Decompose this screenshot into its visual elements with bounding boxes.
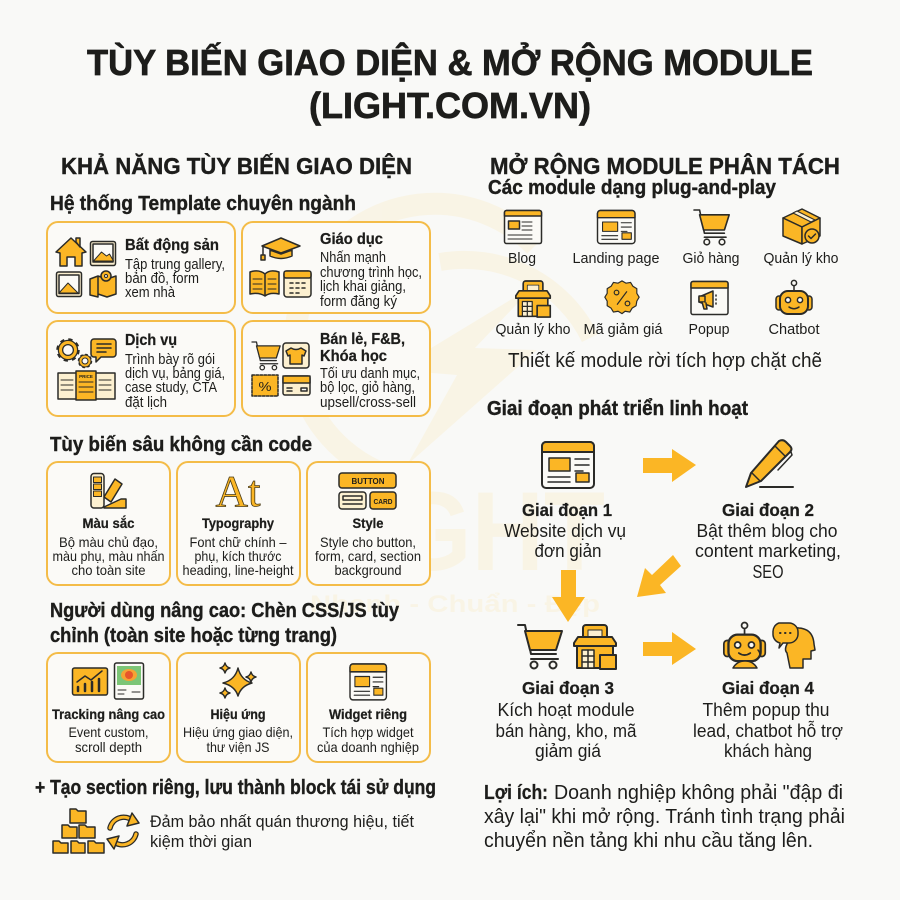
panel: giáo dục bbox=[242, 222, 430, 313]
phase 1: đơn giản bbox=[534, 540, 602, 561]
heading: no code: Tùy biến sâu không cần code bbox=[50, 433, 312, 456]
panel: style: Style bbox=[352, 515, 384, 531]
phase 1: Website dịch vụ bbox=[504, 520, 626, 541]
arrow: phase 1 to 3 bbox=[552, 570, 585, 622]
panel: giáo dục: form đăng ký bbox=[320, 294, 398, 310]
module: discount bbox=[584, 281, 663, 338]
panel: giáo dục: lịch khai giảng, bbox=[320, 279, 406, 295]
icon: services bbox=[58, 339, 116, 400]
icon: pencil bbox=[746, 440, 793, 487]
panel: giáo dục: chương trình học, bbox=[320, 265, 422, 281]
panel: bán lẻ: Tối ưu danh mục, bbox=[320, 366, 420, 382]
icon: retail bbox=[252, 342, 310, 396]
module: inventory box: Quản lý kho bbox=[764, 250, 838, 267]
phase 2: SEO bbox=[752, 561, 784, 582]
panel: widget: của doanh nghiệp bbox=[317, 739, 419, 755]
heading: phases: Giai đoạn phát triển linh hoạt bbox=[487, 398, 748, 420]
module: chatbot bbox=[768, 280, 820, 338]
phase 4 bbox=[693, 622, 843, 761]
icon: robot and human bbox=[724, 622, 815, 668]
module: inventory box bbox=[764, 209, 838, 267]
phase 4: Thêm popup thu bbox=[702, 699, 830, 720]
watermark logo bbox=[295, 204, 605, 618]
module: shopping cart bbox=[682, 210, 740, 267]
title bbox=[87, 41, 813, 126]
panel: typography: heading, line-height bbox=[182, 562, 294, 578]
text: brand consistency: Đảm bảo nhất quán thương hiệu, tiết bbox=[150, 812, 414, 831]
title: TÙY BIẾN GIAO DIỆN & MỞ RỘNG MODULE bbox=[87, 41, 813, 83]
heading: advanced users bbox=[50, 599, 400, 647]
phase 4: khách hàng bbox=[724, 740, 812, 761]
phase 4: Giai đoạn 4 bbox=[722, 678, 814, 698]
phase 3: Giai đoạn 3 bbox=[522, 678, 614, 698]
heading: templates: Hệ thống Template chuyên ngành bbox=[50, 192, 356, 215]
panel: style: form, card, section bbox=[315, 548, 421, 564]
icon: button and card bbox=[339, 473, 396, 509]
panel: màu sắc: cho toàn site bbox=[72, 562, 146, 578]
icon: color swatches bbox=[91, 474, 126, 508]
panel: màu sắc: Màu sắc bbox=[82, 514, 135, 531]
module: shopping cart: Giỏ hàng bbox=[682, 250, 740, 267]
panel: typography: phụ, kích thước bbox=[194, 548, 282, 564]
icon: At letters: At bbox=[216, 467, 260, 516]
heading: plug and play: Các module dạng plug-and-play bbox=[488, 177, 777, 199]
panel: typography bbox=[177, 462, 300, 585]
panel: bán lẻ: bộ lọc, giỏ hàng, bbox=[320, 380, 415, 396]
text: brand consistency: kiệm thời gian bbox=[150, 832, 252, 851]
panel: dịch vụ: PRICE bbox=[79, 374, 93, 379]
panel: dịch vụ: Trình bày rõ gói bbox=[125, 352, 215, 368]
panel: widget: Widget riêng bbox=[329, 706, 407, 722]
text: benefit: xây lại" khi mở rộng. Tránh tình trạng phải bbox=[484, 805, 845, 828]
watermark logo: LIGHT bbox=[305, 469, 605, 594]
panel: hiệu ứng bbox=[177, 653, 300, 762]
module: blog bbox=[504, 210, 542, 267]
text: loose modules: Thiết kế module rời tích hợp chặt chẽ bbox=[508, 350, 822, 372]
panel: tracking bbox=[47, 653, 170, 762]
icon: widget window bbox=[350, 664, 386, 700]
panel: bất động sản: Bất động sản bbox=[125, 237, 219, 254]
module: popup bbox=[688, 282, 730, 338]
heading: advanced users: chỉnh (toàn site hoặc từng trang) bbox=[50, 624, 337, 647]
panel: màu sắc: màu phụ, màu nhấn bbox=[52, 548, 164, 564]
icon: folders and sync bbox=[53, 809, 139, 853]
arrow: phase 2 to 3 bbox=[637, 555, 681, 597]
panel: bán lẻ bbox=[242, 321, 430, 416]
module: landing page: Landing page bbox=[572, 250, 660, 267]
panel: bất động sản: xem nhà bbox=[125, 285, 176, 301]
module: discount: Mã giảm giá bbox=[584, 321, 663, 338]
icon: button and card: CARD bbox=[374, 497, 393, 506]
phase 1: Giai đoạn 1 bbox=[522, 500, 612, 520]
panel: giáo dục: Nhấn mạnh bbox=[320, 250, 386, 266]
panel: dịch vụ bbox=[47, 321, 235, 416]
heading: left column: KHẢ NĂNG TÙY BIẾN GIAO DIỆN bbox=[61, 151, 412, 179]
module grid bbox=[496, 209, 838, 338]
panel: tracking: Tracking nâng cao bbox=[52, 706, 165, 722]
panel: hiệu ứng: Hiệu ứng bbox=[210, 706, 266, 722]
panel: widget bbox=[307, 653, 430, 762]
phase 3: bán hàng, kho, mã bbox=[496, 720, 637, 741]
icon: button and card: BUTTON bbox=[352, 476, 384, 486]
panel: hiệu ứng: thư viện JS bbox=[206, 739, 270, 755]
phase 4: lead, chatbot hỗ trợ bbox=[693, 720, 843, 741]
module: blog: Blog bbox=[508, 250, 536, 267]
text: benefit: Doanh nghiệp không phải "đập đi bbox=[554, 781, 843, 804]
panel: bán lẻ: upsell/cross-sell bbox=[320, 395, 416, 411]
phase 2: Bật thêm blog cho bbox=[696, 520, 838, 541]
text: benefit: Lợi ích: bbox=[484, 781, 548, 804]
heading: reusable block: + Tạo section riêng, lưu thành block tái sử dụng bbox=[35, 776, 436, 799]
title: (LIGHT.COM.VN) bbox=[309, 85, 591, 126]
icon: website bbox=[542, 442, 594, 488]
panel: bán lẻ: Bán lẻ, F&B, bbox=[320, 331, 405, 348]
heading: right column: MỞ RỘNG MODULE PHÂN TÁCH bbox=[490, 151, 840, 179]
panel: typography: Typography bbox=[202, 515, 274, 531]
panel: hiệu ứng: Hiệu ứng giao diện, bbox=[183, 724, 293, 740]
phase 3 bbox=[496, 625, 637, 761]
module: warehouse bbox=[496, 281, 570, 338]
panel: dịch vụ: Dịch vụ bbox=[125, 332, 177, 349]
panel: giáo dục: Giáo dục bbox=[320, 231, 383, 248]
module: chatbot: Chatbot bbox=[768, 321, 820, 338]
panel: màu sắc: Bộ màu chủ đạo, bbox=[59, 534, 158, 550]
panel: bất động sản: bản đồ, form bbox=[125, 271, 199, 287]
phase 2: Giai đoạn 2 bbox=[722, 500, 814, 520]
panel: tracking: Event custom, bbox=[68, 724, 148, 740]
watermark logo: Nhanh - Chuẩn - Đẹp bbox=[310, 591, 600, 618]
panel: dịch vụ: case study, CTA bbox=[125, 380, 217, 396]
icon: sparkles bbox=[220, 663, 256, 698]
icon: tracking chart and heatmap bbox=[72, 663, 144, 699]
icon: real estate bbox=[56, 238, 116, 297]
module: popup: Popup bbox=[688, 321, 730, 338]
module: landing page bbox=[572, 210, 660, 267]
panel: style: Style cho button, bbox=[320, 534, 416, 550]
panel: bán lẻ: % bbox=[258, 379, 272, 394]
text: benefit bbox=[484, 781, 845, 852]
panel: widget: Tích hợp widget bbox=[322, 724, 414, 740]
heading: advanced users: Người dùng nâng cao: Chèn CSS/JS tùy bbox=[50, 599, 400, 622]
icon: education bbox=[250, 238, 311, 297]
phase 3: giảm giá bbox=[535, 740, 602, 761]
panel: tracking: scroll depth bbox=[75, 739, 142, 755]
arrow: phase 1 to 2 bbox=[643, 449, 696, 482]
icon: cart and warehouse bbox=[518, 625, 616, 669]
text: benefit: chuyển nền tảng khi nhu cầu tăng lên. bbox=[484, 829, 813, 852]
text: brand consistency bbox=[150, 812, 414, 851]
panel: typography: Font chữ chính – bbox=[190, 534, 287, 550]
panel: dịch vụ: đặt lịch bbox=[125, 395, 167, 411]
phase 3: Kích hoạt module bbox=[498, 699, 634, 720]
panel: style bbox=[307, 462, 430, 585]
panel: style: background bbox=[334, 562, 402, 578]
phase 2: content marketing, bbox=[695, 540, 841, 561]
phase 2 bbox=[695, 440, 841, 582]
panel: màu sắc bbox=[47, 462, 170, 585]
module: warehouse: Quản lý kho bbox=[496, 321, 570, 338]
panel: bán lẻ: Khóa học bbox=[320, 348, 387, 365]
panel: bất động sản: Tập trung gallery, bbox=[125, 257, 225, 273]
panel: bất động sản bbox=[47, 222, 235, 313]
phase 1 bbox=[504, 442, 626, 561]
panel: dịch vụ: dịch vụ, bảng giá, bbox=[125, 366, 225, 382]
arrow: phase 3 to 4 bbox=[643, 632, 696, 665]
